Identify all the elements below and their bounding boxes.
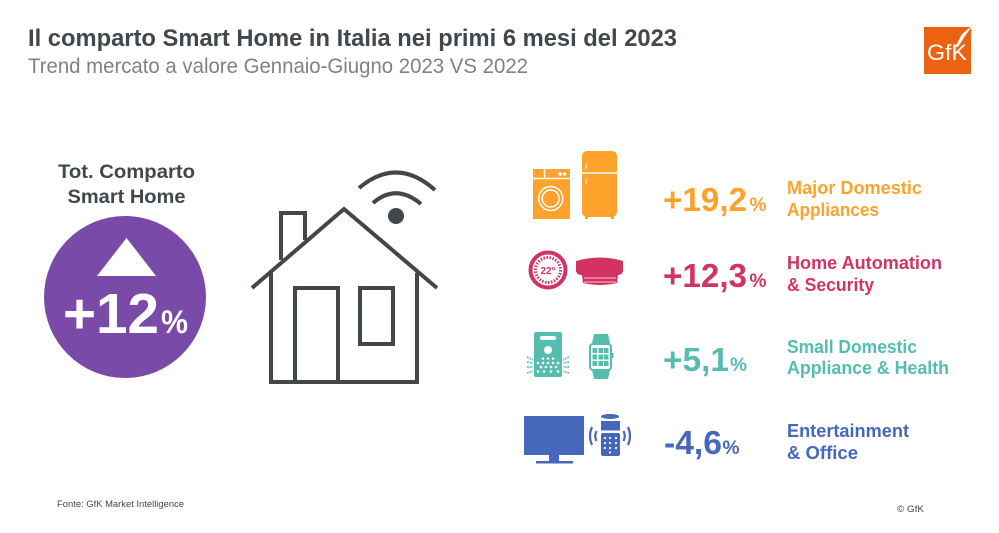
value: total: +12: [63, 282, 159, 346]
percent sign: %: [722, 438, 740, 459]
panel: total smart home: [44, 162, 206, 378]
icon: smartwatch: [590, 334, 614, 379]
label: home automation: Home Automation: [787, 253, 942, 273]
percent sign: %: [750, 195, 767, 216]
row: home automation: [530, 252, 942, 295]
value: home automation: +12,3: [663, 257, 747, 294]
row: small domestic: [527, 332, 949, 379]
heading: smart home: Smart Home: [68, 187, 186, 208]
label: major domestic: Appliances: [787, 200, 879, 220]
icon: air purifier: [527, 332, 569, 377]
icon: smart speaker: [590, 414, 630, 456]
label: entertainment: & Office: [787, 443, 858, 463]
heading: total: Tot. Comparto: [58, 162, 195, 183]
icon: thermostat: 22°: [540, 266, 556, 277]
icon: thermostat: [530, 252, 566, 288]
icon: GfK logo: GfK: [927, 40, 967, 65]
value: major domestic: +19,2: [663, 181, 747, 218]
row: major domestic appliances: [533, 151, 922, 220]
percent sign: %: [730, 355, 747, 376]
percent sign: %: [161, 304, 188, 340]
copyright: © GfK: [897, 504, 924, 514]
label: small domestic: Appliance & Health: [787, 358, 949, 378]
icon: smart house: [252, 172, 437, 382]
title: Il comparto Smart Home in Italia nei primi 6 mesi del 2023: [28, 25, 677, 52]
icon: up triangle: [97, 238, 156, 276]
source note: Fonte: GfK Market Intelligence: [57, 499, 184, 509]
label: entertainment: Entertainment: [787, 421, 909, 441]
subtitle: Trend mercato a valore Gennaio-Giugno 2023 VS 2022: [28, 55, 528, 78]
icon: smoke detector: [576, 258, 623, 285]
icon: washing machine: [533, 169, 570, 219]
label: small domestic: Small Domestic: [787, 337, 917, 357]
value: entertainment: -4,6: [664, 424, 722, 461]
label: major domestic: Major Domestic: [787, 178, 922, 198]
row: entertainment: [524, 414, 909, 464]
percent sign: %: [750, 271, 767, 292]
icon: television: [524, 416, 584, 464]
value: small domestic: +5,1: [663, 341, 729, 378]
purple circle: [44, 216, 206, 378]
label: home automation: & Security: [787, 275, 874, 295]
icon: fridge: [582, 151, 617, 219]
icon: GfK logo: [924, 25, 973, 74]
